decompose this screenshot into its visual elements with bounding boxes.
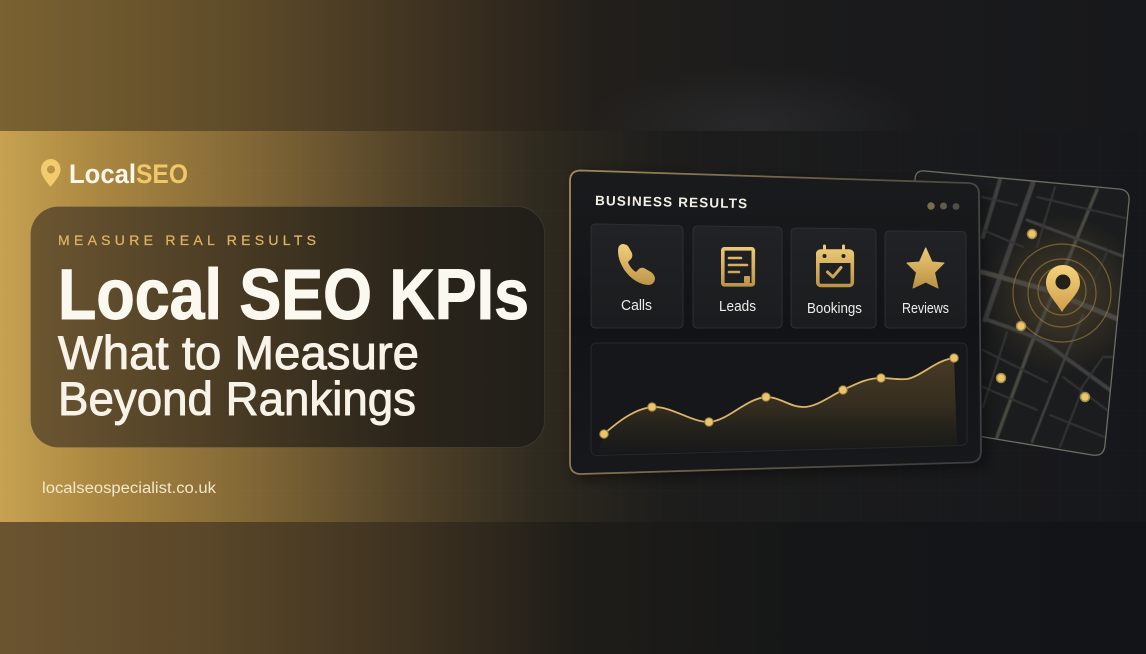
top background band xyxy=(0,0,1146,131)
chart area fill xyxy=(597,358,957,454)
card: reviews: Reviews xyxy=(902,301,949,317)
bottom background band xyxy=(0,522,1146,654)
main title: Local SEO KPIs xyxy=(58,256,529,335)
eyebrow text: MEASURE REAL RESULTS xyxy=(58,232,316,248)
line chart card xyxy=(591,343,967,456)
panel: business results dashboard xyxy=(570,170,981,474)
logo: LocalSEO xyxy=(41,159,188,189)
icon: phone xyxy=(618,244,655,285)
top band grey glow xyxy=(585,65,925,185)
map roads xyxy=(982,180,1130,447)
icon: calendar xyxy=(816,246,854,286)
card: leads xyxy=(693,226,782,328)
subtitle: Beyond Rankings xyxy=(58,372,416,425)
icon: logo location pin xyxy=(41,159,60,187)
map card xyxy=(914,170,1130,456)
card: calls: Calls xyxy=(621,298,652,314)
icon: document xyxy=(723,249,753,285)
subtitle xyxy=(58,326,419,425)
chart line xyxy=(604,358,954,434)
logo: LocalSEO: Local xyxy=(69,159,136,189)
subtitle: What to Measure xyxy=(58,326,419,379)
chart points xyxy=(600,354,958,438)
card: bookings xyxy=(791,228,876,328)
logo: LocalSEO: SEO xyxy=(136,159,188,189)
map location dots xyxy=(996,230,1090,402)
icon: star xyxy=(907,248,944,288)
window dots xyxy=(927,202,959,210)
card: leads: Leads xyxy=(719,299,756,315)
card: reviews xyxy=(885,231,966,328)
icon: map pin xyxy=(1046,265,1080,312)
central hero band xyxy=(0,131,1146,522)
card: bookings: Bookings xyxy=(807,301,862,317)
panel shadow xyxy=(575,174,985,478)
card: calls xyxy=(591,224,683,328)
website url: localseospecialist.co.uk xyxy=(42,480,216,497)
panel heading: BUSINESS RESULTS xyxy=(595,193,747,211)
location rings xyxy=(1013,244,1111,342)
panel: headline xyxy=(30,206,544,448)
